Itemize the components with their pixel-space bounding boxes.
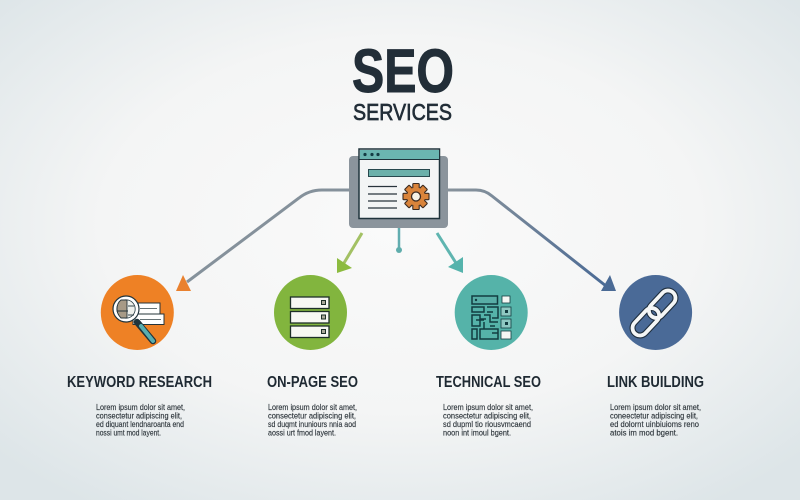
icon: technical seo: [455, 275, 528, 350]
central browser icon: [349, 149, 448, 228]
text block: on-page seo: sd duqmt inuniours nnia aod: [268, 419, 356, 429]
subtitle: services: SERVICES: [353, 99, 452, 125]
text block: link building: [610, 402, 701, 438]
connector: center dot: [396, 228, 402, 253]
text block: technical seo: [443, 402, 533, 438]
text block: keyword research: ed diquant lendnaroanta end: [96, 419, 184, 429]
arrow: to keyword research: [176, 190, 350, 291]
heading: keyword research: KEYWORD RESEARCH: [67, 374, 212, 391]
icon: on-page seo servers: [274, 275, 347, 350]
text block: keyword research: Lorem ipsum dolor sit amet,: [96, 402, 185, 412]
icon: gear: [403, 184, 429, 210]
icon: keyword research: [101, 275, 174, 350]
text block: on-page seo: Lorem ipsum dolor sit amet,: [268, 402, 357, 412]
text block: link building: Lorem ipsum dolor sit amet,: [610, 402, 701, 412]
text block: keyword research: nossi umt mod layent.: [96, 428, 161, 438]
icon: link building chain: [619, 275, 692, 350]
magnifier: [113, 296, 153, 341]
text block: technical seo: consectetur adipiscing elit,: [443, 410, 531, 420]
text block: technical seo: sd dupml tio riousvmcaend: [443, 419, 531, 429]
text block: on-page seo: [268, 402, 357, 438]
text block: link building: coneectetur adipiscing elit,: [610, 410, 698, 420]
title: SEO: SEO: [352, 37, 454, 105]
text block: keyword research: [96, 402, 185, 438]
text block: link building: atois im mod bgent.: [610, 428, 678, 438]
heading: link building: LINK BUILDING: [607, 374, 704, 391]
arrow: to on-page seo: [337, 233, 362, 273]
heading: technical seo: TECHNICAL SEO: [436, 374, 541, 391]
text block: on-page seo: consectetur adipiscing elit,: [268, 410, 356, 420]
heading: on-page seo: ON-PAGE SEO: [267, 374, 358, 391]
arrow: to technical seo: [437, 233, 463, 273]
text block: link building: ed dolornt uinbiuioms reno: [610, 419, 699, 429]
text block: keyword research: consectetur adipiscing elit,: [96, 410, 182, 420]
arrow: to link building: [447, 190, 616, 291]
text block: on-page seo: aossi urt fmod layent.: [268, 428, 336, 438]
text block: technical seo: noon int imoul bgent.: [443, 428, 511, 438]
text block: technical seo: Lorem ipsum dolor sit amet,: [443, 402, 533, 412]
